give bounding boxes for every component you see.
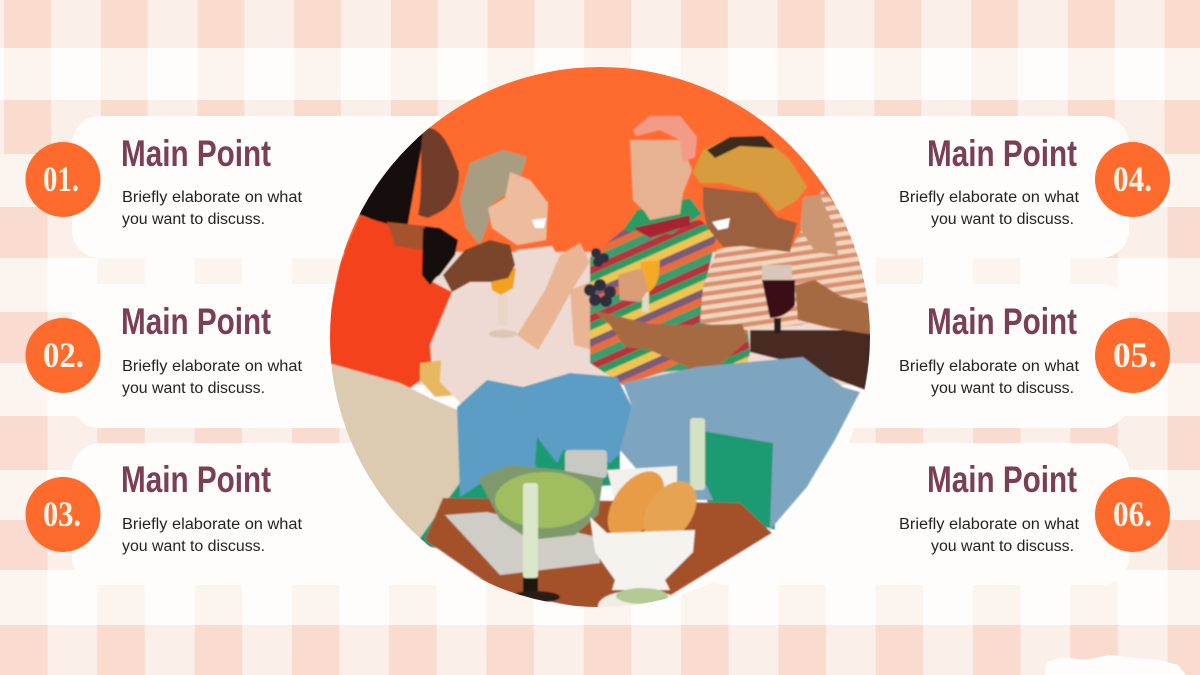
panel: point 02 [26, 284, 502, 428]
glass: juice [640, 260, 660, 312]
person 3: pink hair [633, 116, 697, 162]
badge 04 [1095, 142, 1170, 217]
marble placemat [445, 512, 600, 575]
glass jar [565, 450, 607, 478]
candle: centre [690, 418, 705, 490]
person 4: brown bag [750, 330, 875, 390]
person 2: face [488, 172, 548, 245]
badge 05: 05. [1113, 335, 1157, 375]
person 2: jeans [457, 373, 632, 497]
heading 05: Main Point [927, 301, 1077, 342]
panel: point 05 [699, 284, 1170, 428]
person 2: shirt [439, 244, 556, 404]
panel: point 01 [26, 116, 502, 258]
person 1: face [418, 128, 459, 218]
text 04 [899, 189, 1080, 228]
card 03 [72, 443, 502, 585]
text 01 [122, 189, 303, 228]
person 3: striped sweater [590, 220, 750, 385]
text 05: Briefly elaborate on what [899, 358, 1080, 375]
circular photo: friends sharing food and drinks [320, 60, 880, 622]
person 3: collar [623, 198, 702, 234]
card 06 [699, 443, 1129, 585]
text 05 [899, 358, 1080, 397]
text 05: you want to discuss. [931, 380, 1074, 397]
glass: orange drink [489, 268, 517, 338]
coffee table [425, 498, 772, 612]
bowl of bread [590, 461, 708, 590]
person 4: neck and face [703, 187, 797, 252]
badge 03 [26, 477, 100, 552]
plate with greens [598, 588, 682, 622]
heading 01: Main Point [121, 133, 271, 174]
person 4: hand on shoulder [800, 195, 838, 255]
person 4: pointing arm [592, 310, 748, 368]
text 02: you want to discuss. [122, 380, 265, 397]
badge 02 [26, 318, 100, 393]
badge 02: 02. [43, 335, 84, 375]
heading 06: Main Point [927, 459, 1077, 500]
badge 01 [26, 142, 100, 217]
person 1: hand [443, 240, 515, 292]
text 03: you want to discuss. [122, 538, 265, 555]
person 4: jeans [620, 357, 860, 530]
card 01 [72, 116, 502, 258]
badge 01: 01. [43, 159, 79, 199]
badge 06 [1095, 477, 1170, 552]
person 4: arm holding wine [795, 280, 875, 335]
text 02: Briefly elaborate on what [122, 358, 303, 375]
person 2: hair [460, 150, 527, 245]
text 01: you want to discuss. [122, 211, 265, 228]
panel: point 06 [699, 443, 1170, 585]
person 1: neck and chest [387, 222, 425, 250]
person 1: hair [359, 132, 458, 278]
text 03 [122, 516, 303, 555]
person 3: face [630, 140, 692, 220]
text 01: Briefly elaborate on what [122, 189, 303, 206]
panel: point 03 [26, 443, 502, 585]
green sofa [415, 425, 775, 550]
heading 04: Main Point [927, 133, 1077, 174]
glass: red wine [762, 265, 795, 333]
candle: left [510, 483, 560, 603]
person 1: beige trousers [331, 362, 460, 538]
hand holding juice [618, 268, 648, 302]
text 06: you want to discuss. [931, 538, 1074, 555]
panel: point 04 [699, 116, 1170, 258]
badge 03: 03. [43, 494, 81, 534]
badge 04: 04. [1113, 159, 1152, 199]
badge 05 [1095, 318, 1170, 393]
person 1: sweater [325, 216, 452, 392]
text 06: Briefly elaborate on what [899, 516, 1080, 533]
paint smear: bottom right [1045, 655, 1186, 675]
card 04 [699, 116, 1129, 258]
badge 06: 06. [1113, 494, 1152, 534]
cushion [420, 360, 456, 397]
person 1: long hair over sweater [422, 228, 458, 285]
person 4: smile [712, 218, 730, 230]
heading 03: Main Point [121, 459, 271, 500]
salad bowl [478, 465, 603, 540]
text 06 [899, 516, 1080, 555]
person 2: smile [532, 218, 546, 228]
text 02 [122, 358, 303, 397]
person 4: golden hair [693, 137, 807, 212]
text 04: Briefly elaborate on what [899, 189, 1080, 206]
person 2: arm [516, 242, 592, 350]
card 02 [72, 284, 502, 428]
heading 02: Main Point [121, 301, 271, 342]
text 04: you want to discuss. [931, 211, 1074, 228]
small white bowl [606, 465, 678, 497]
card 05 [699, 284, 1129, 428]
text 03: Briefly elaborate on what [122, 516, 303, 533]
grapes [584, 248, 616, 307]
person 4: shirt [700, 190, 880, 330]
